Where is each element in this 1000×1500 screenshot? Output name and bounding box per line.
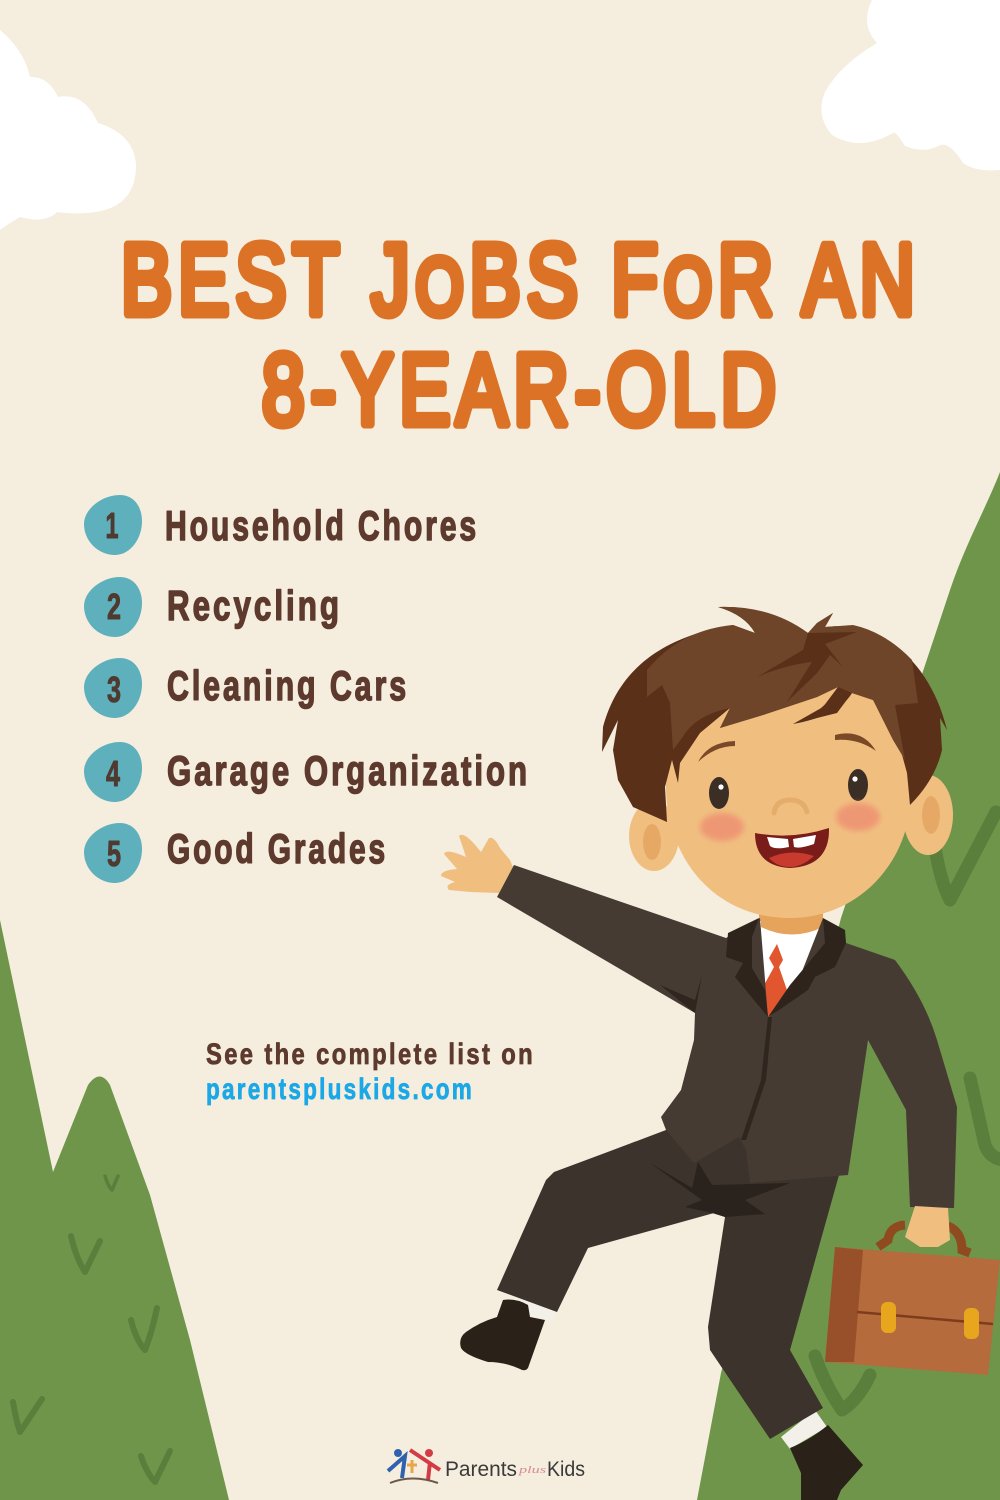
item 2 (84, 577, 342, 637)
lower leg sock (781, 1410, 827, 1449)
mountain: right with checks (697, 472, 1000, 1500)
necktie (763, 944, 788, 1017)
hair (602, 607, 947, 822)
item 3: 3 (107, 669, 121, 710)
item 4 (84, 742, 530, 802)
nose (774, 800, 807, 813)
neck shade over collar (761, 918, 823, 934)
title (121, 224, 921, 446)
logo: Parents plus Kids: Parents (445, 1458, 517, 1481)
strap (857, 1312, 993, 1324)
item 3 (84, 658, 409, 718)
illustration: boy in suit (441, 607, 1000, 1500)
item 2: Recycling (167, 582, 342, 629)
raised shoe (460, 1300, 545, 1370)
eyebrows (698, 733, 876, 762)
hand on briefcase (905, 1206, 950, 1247)
logo: Parents plus Kids: Kids (547, 1458, 585, 1481)
pants (497, 1130, 839, 1439)
logo icon (388, 1449, 440, 1483)
mountain: left with checks (0, 920, 229, 1500)
raised leg sock (514, 1296, 557, 1322)
title: 8-YEAR-OLD (262, 334, 782, 446)
blush (700, 803, 880, 841)
shirt (752, 921, 825, 992)
item 2: 2 (107, 586, 121, 627)
left ear (629, 801, 679, 871)
handle (878, 1225, 970, 1253)
item 4: Garage Organization (167, 747, 530, 794)
cloud: top right (821, 0, 1000, 170)
briefcase (825, 1206, 1000, 1375)
waving hand (441, 835, 513, 893)
item 4: 4 (106, 753, 120, 794)
item 5: 5 (107, 833, 121, 874)
text: see the complete list: parentspluskids.com (206, 1073, 474, 1106)
item 5 (84, 823, 388, 883)
side panel (825, 1247, 863, 1362)
cloud: top left (0, 30, 136, 230)
logo: Parents plus Kids (388, 1449, 585, 1483)
text: see the complete list (206, 1038, 535, 1106)
item 1 (84, 495, 479, 555)
list: jobs (84, 495, 530, 883)
item 1: 1 (106, 505, 118, 546)
eyes (709, 769, 868, 809)
face (664, 670, 911, 918)
title: BEST JOBS FOR AN (121, 224, 921, 336)
right ear (903, 775, 953, 855)
logo: Parents plus Kids: plus (518, 1464, 546, 1476)
lower shoe (790, 1425, 863, 1500)
jacket (497, 865, 957, 1208)
case body (825, 1247, 1000, 1375)
lapels (726, 918, 846, 1017)
buckles (881, 1302, 896, 1333)
mouth (755, 828, 829, 868)
item 1: Household Chores (165, 502, 479, 549)
text: see the complete list: See the complete list on (206, 1038, 535, 1071)
item 5: Good Grades (167, 825, 388, 872)
neck (759, 910, 823, 934)
item 3: Cleaning Cars (167, 662, 409, 709)
